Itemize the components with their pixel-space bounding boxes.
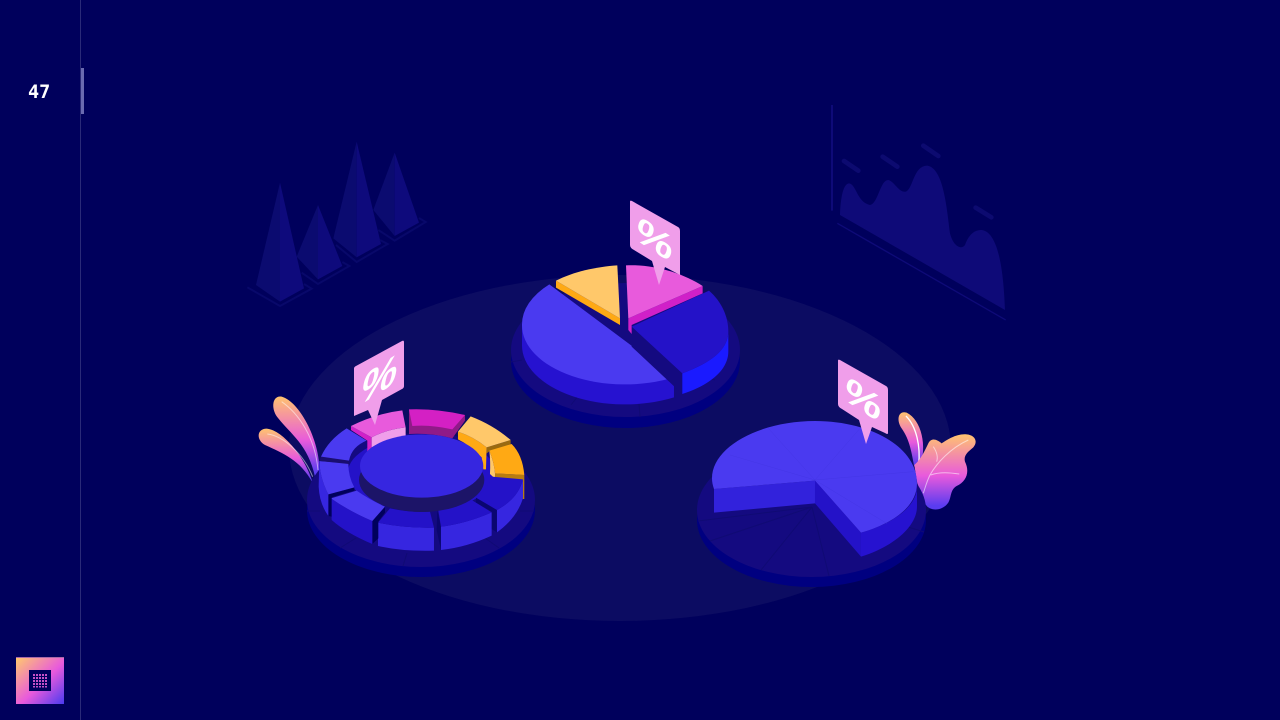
hub floor (348, 436, 496, 511)
scroll indicator (81, 68, 84, 114)
percent pin: % (355, 342, 404, 417)
right pie chart (697, 360, 926, 587)
left ring chart (307, 341, 535, 577)
percent pin (838, 360, 888, 444)
percent pin (630, 201, 680, 285)
pink slice (626, 265, 703, 334)
lower right segment (437, 500, 492, 550)
hub shadow (359, 448, 484, 512)
percent pin: % (839, 369, 888, 428)
right blue segment (476, 477, 523, 532)
base platform (307, 433, 535, 577)
base platform (511, 283, 740, 428)
upper left segment (319, 428, 367, 464)
sidebar divider (80, 0, 81, 720)
yellow slice (556, 265, 620, 325)
percent pin: % (631, 209, 679, 268)
ring segments (319, 409, 524, 551)
magenta segment (409, 409, 465, 438)
big blue slice (522, 284, 674, 404)
left segment (319, 461, 354, 517)
base platform (697, 443, 926, 587)
background area chart (832, 105, 1006, 320)
right leaves (899, 412, 976, 510)
middle pie chart (511, 201, 740, 428)
dark blue slice (632, 291, 728, 394)
left leaves (259, 397, 319, 483)
logo (16, 657, 64, 704)
orange segment (489, 444, 524, 499)
bottom segment (378, 508, 434, 551)
yellow segment (458, 416, 511, 469)
floor ellipse (289, 275, 951, 621)
cut-out pie slice (712, 421, 917, 557)
pink segment (351, 410, 406, 452)
background pyramids (247, 142, 426, 306)
hub disc (360, 434, 483, 498)
lower left segment (331, 491, 385, 544)
page number: 47 (28, 82, 50, 103)
